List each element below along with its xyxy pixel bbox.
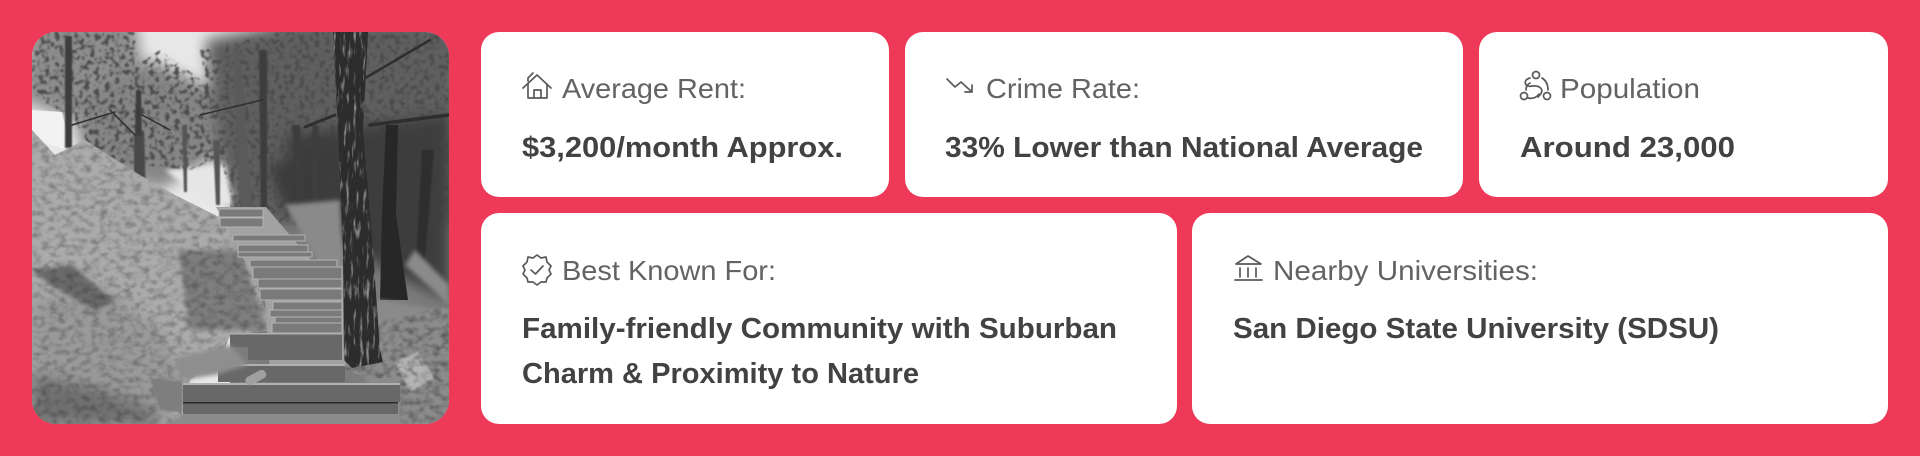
- foreground ground and boulders: [170, 414, 449, 424]
- large pine trunk: [333, 32, 383, 368]
- value: best known for: Family-friendly Community with Suburban: [522, 313, 1117, 345]
- canopy soft tone: [20, 20, 460, 225]
- card: nearby universities: [1192, 213, 1888, 424]
- second dark trunk: [380, 125, 408, 300]
- bright sky gaps: [165, 165, 232, 205]
- card: average rent: [481, 32, 889, 197]
- rock texture: [32, 130, 272, 424]
- lower right base: [230, 195, 449, 424]
- value: average rent: $3,200/month Approx.: [522, 132, 843, 164]
- right ground texture: [345, 305, 449, 424]
- left rock hill: [32, 130, 272, 424]
- card: best known for: Charm & Proximity to Nature: [522, 358, 919, 390]
- icon: university building: [1235, 256, 1262, 280]
- label: average rent: Average Rent:: [562, 73, 746, 104]
- icon: people network: [1520, 72, 1550, 100]
- card: crime rate: [905, 32, 1463, 197]
- label: best known for: Best Known For:: [562, 255, 776, 286]
- stairs: [183, 207, 400, 414]
- label: population: Population: [1560, 73, 1700, 104]
- thin trees: [65, 36, 434, 260]
- card: best known for: [481, 213, 1177, 424]
- right ground: [285, 200, 449, 424]
- icon: trending down arrow: [947, 79, 972, 92]
- canopy leaves: [32, 32, 449, 225]
- label: crime rate: Crime Rate:: [986, 73, 1140, 104]
- icon: house: [523, 73, 551, 98]
- value: nearby universities: San Diego State University (SDSU): [1233, 313, 1719, 345]
- value: population: Around 23,000: [1520, 132, 1735, 164]
- dark woodland on the right: [285, 115, 449, 300]
- photo: black and white forest trail with wooden stairs: [20, 20, 460, 424]
- icon: verified badge: [523, 255, 551, 285]
- label: nearby universities: Nearby Universities:: [1273, 255, 1538, 286]
- value: crime rate: 33% Lower than National Average: [945, 132, 1423, 164]
- card: population: [1479, 32, 1888, 197]
